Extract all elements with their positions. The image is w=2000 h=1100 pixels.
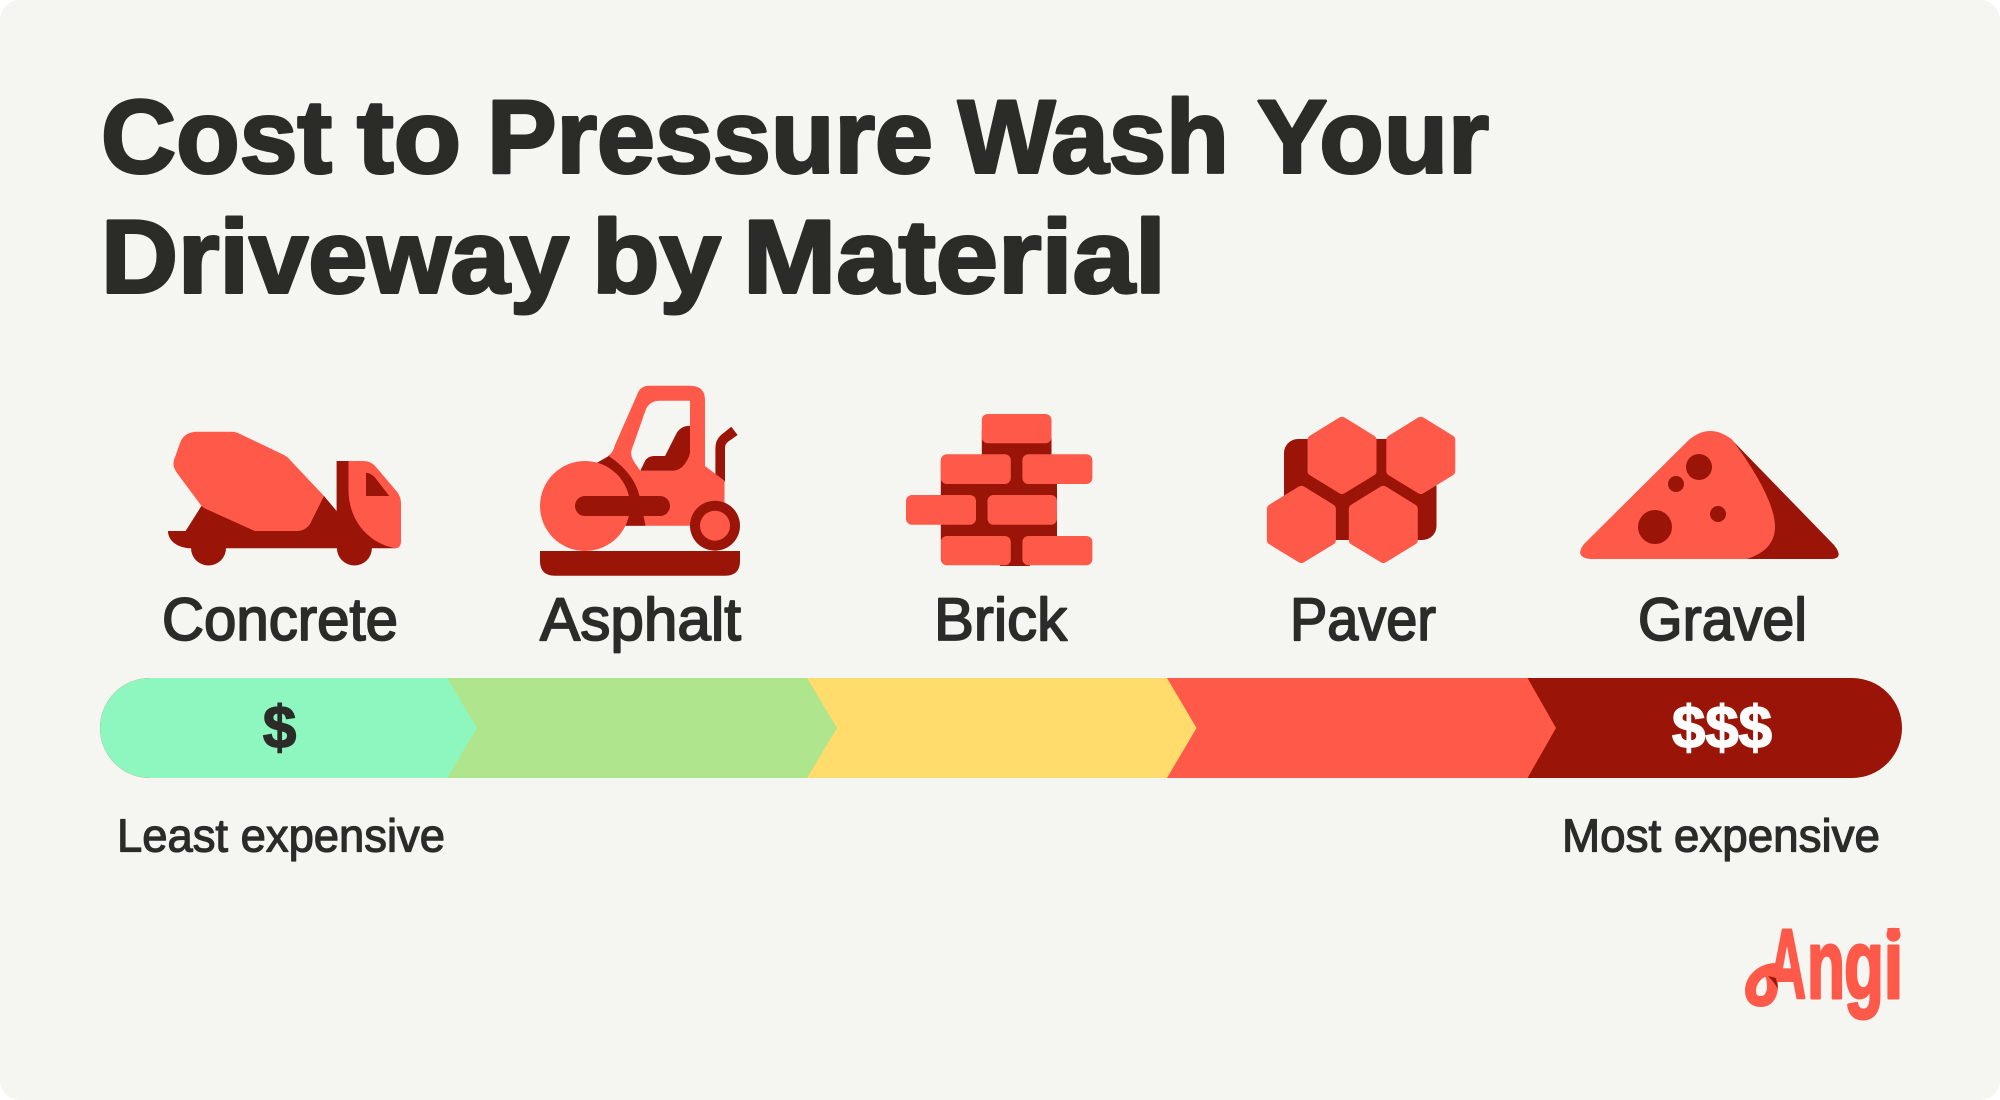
- most expensive label: Most expensive: [1562, 810, 1880, 862]
- title: [101, 80, 1489, 316]
- icon: hexagon pavers: [1272, 422, 1450, 558]
- material labels: Paver: [1290, 586, 1436, 653]
- title: Pressure: [487, 80, 933, 196]
- title: Material: [743, 200, 1166, 316]
- Angi logo: n: [1807, 909, 1845, 1019]
- Angi logo: A: [1768, 909, 1806, 1019]
- material labels: Brick: [934, 586, 1068, 653]
- title: by: [592, 200, 721, 316]
- one dollar sign: $: [263, 694, 296, 761]
- cost scale bar: [100, 678, 1902, 778]
- icon: gravel pile: [1580, 431, 1839, 559]
- icon: concrete mixer truck: [168, 432, 401, 566]
- three dollar signs: $$$: [1672, 694, 1772, 761]
- material labels: [162, 586, 1807, 653]
- material labels: Concrete: [162, 586, 398, 653]
- Angi logo: g: [1844, 909, 1884, 1019]
- Angi logo: i: [1884, 909, 1904, 1019]
- title: Wash: [958, 80, 1229, 196]
- material labels: Gravel: [1638, 586, 1807, 653]
- icon: brick wall: [906, 414, 1092, 566]
- icon: asphalt road roller: [540, 386, 740, 576]
- title: Driveway: [101, 200, 569, 316]
- title: Cost: [101, 80, 332, 196]
- Angi logo: [1750, 909, 1904, 1019]
- title: to: [357, 80, 461, 196]
- least expensive label: Least expensive: [117, 810, 445, 862]
- material labels: Asphalt: [540, 586, 741, 653]
- title: Your: [1257, 80, 1489, 196]
